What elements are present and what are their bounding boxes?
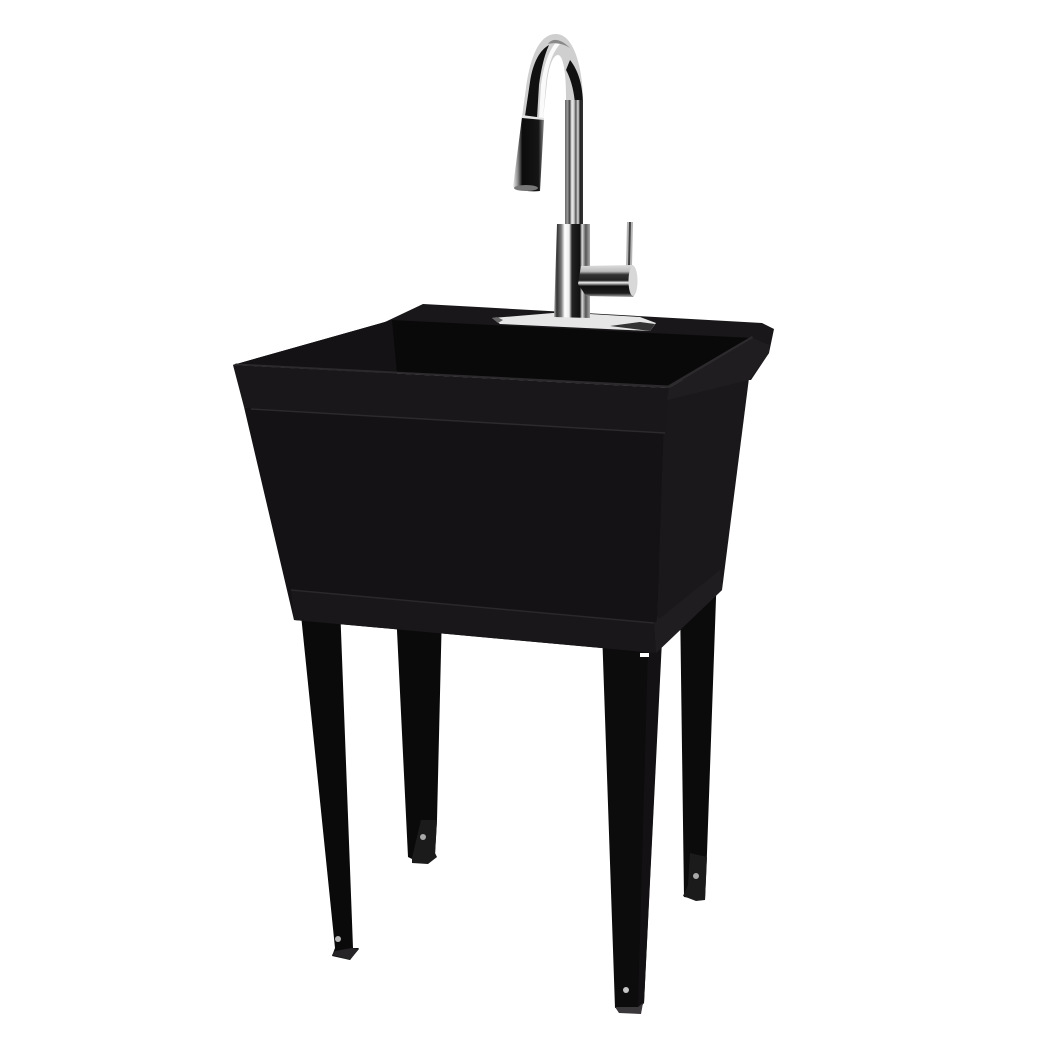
tub rim right	[667, 338, 769, 400]
faucet	[513, 34, 638, 318]
faucet spray head	[513, 117, 544, 191]
faucet lever	[626, 222, 633, 266]
front left leg	[300, 605, 359, 960]
tub rim front	[233, 365, 669, 433]
front right leg	[602, 630, 662, 1014]
faucet base body	[554, 224, 590, 318]
legs	[300, 570, 717, 1014]
deck at rear of tub	[385, 304, 774, 380]
tub	[233, 304, 774, 657]
rear left leg	[396, 610, 442, 864]
rear right leg	[680, 570, 717, 901]
tub interior left wall	[233, 320, 397, 374]
faucet spout arc	[522, 34, 583, 135]
tub interior	[233, 320, 753, 388]
tub body side face	[656, 378, 749, 653]
faucet deck plate	[492, 313, 656, 331]
tub body front face	[244, 407, 665, 653]
leg bracket glint	[640, 653, 649, 657]
faucet riser	[565, 100, 583, 225]
tub bottom band	[291, 590, 656, 653]
faucet handle	[578, 265, 637, 297]
